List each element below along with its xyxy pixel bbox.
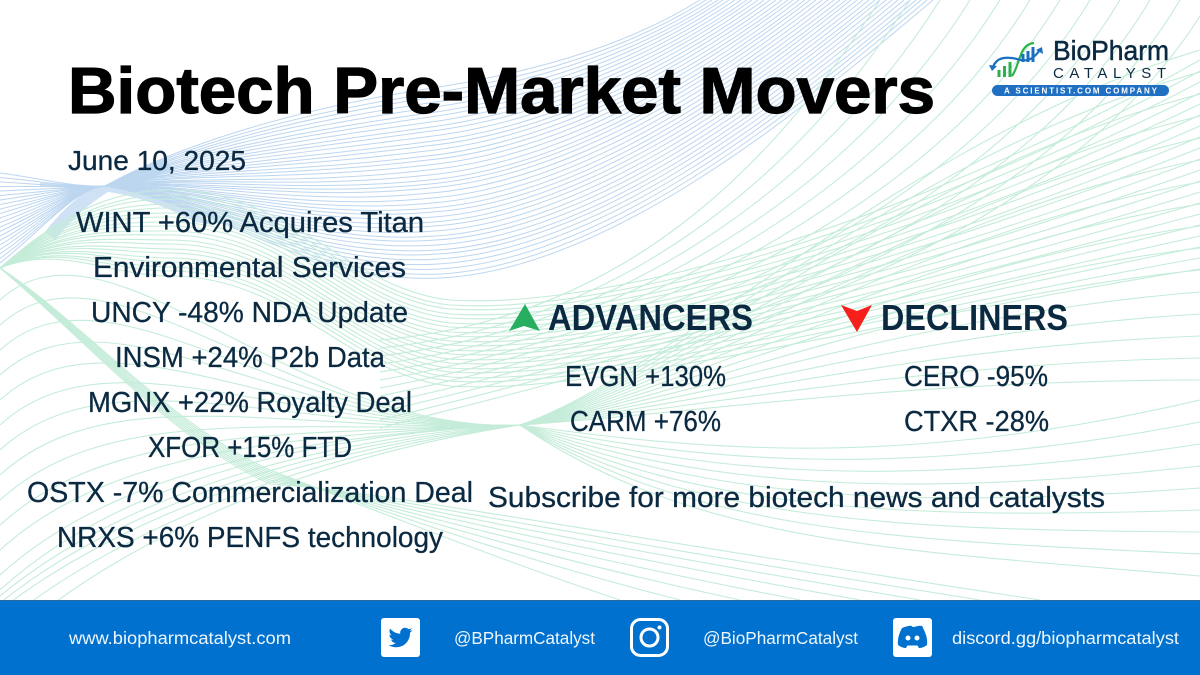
subscribe call to action: Subscribe for more biotech news and catalysts: [488, 482, 1105, 514]
news list: Environmental Services: [93, 252, 406, 284]
website link: www.biopharmcatalyst.com: [68, 628, 291, 648]
icon: discord: [893, 618, 932, 657]
logo icon: DNA chart: [989, 43, 1043, 77]
news list: OSTX -7% Commercialization Deal: [27, 477, 473, 509]
icon: red down arrow: [841, 305, 872, 332]
date: June 10, 2025: [68, 145, 246, 176]
panel: advancers: ADVANCERS: [548, 297, 753, 338]
logo: CATALYST: [1053, 65, 1166, 82]
news list: MGNX +22% Royalty Deal: [88, 387, 412, 419]
panel: decliners: DECLINERS: [881, 297, 1068, 338]
icon: green up arrow: [509, 304, 540, 331]
news list: [27, 207, 473, 554]
instagram handle: @BioPharmCatalyst: [703, 628, 858, 648]
logo: BioPharm: [1053, 35, 1169, 66]
news list: UNCY -48% NDA Update: [91, 297, 408, 329]
news list: NRXS +6% PENFS technology: [57, 522, 443, 554]
panel: advancers: EVGN +130%: [565, 361, 726, 393]
news list: INSM +24% P2b Data: [115, 342, 386, 374]
logo: [989, 35, 1169, 96]
panel: decliners: CERO -95%: [904, 361, 1048, 393]
icon: instagram: [632, 620, 668, 656]
title: Biotech Pre-Market Movers: [68, 54, 935, 127]
logo: A SCIENTIST.COM COMPANY: [1004, 86, 1158, 96]
news list: XFOR +15% FTD: [148, 432, 352, 464]
panel: advancers: CARM +76%: [570, 406, 721, 438]
discord link: discord.gg/biopharmcatalyst: [952, 628, 1179, 648]
panel: decliners: CTXR -28%: [904, 406, 1049, 438]
news list: WINT +60% Acquires Titan: [76, 207, 424, 239]
icon: twitter: [381, 618, 420, 657]
panel: advancers: [509, 297, 753, 438]
background: blue wave lines: [0, 0, 933, 278]
twitter handle: @BPharmCatalyst: [454, 628, 595, 648]
panel: decliners: [841, 297, 1068, 438]
footer banner: [0, 600, 1200, 675]
